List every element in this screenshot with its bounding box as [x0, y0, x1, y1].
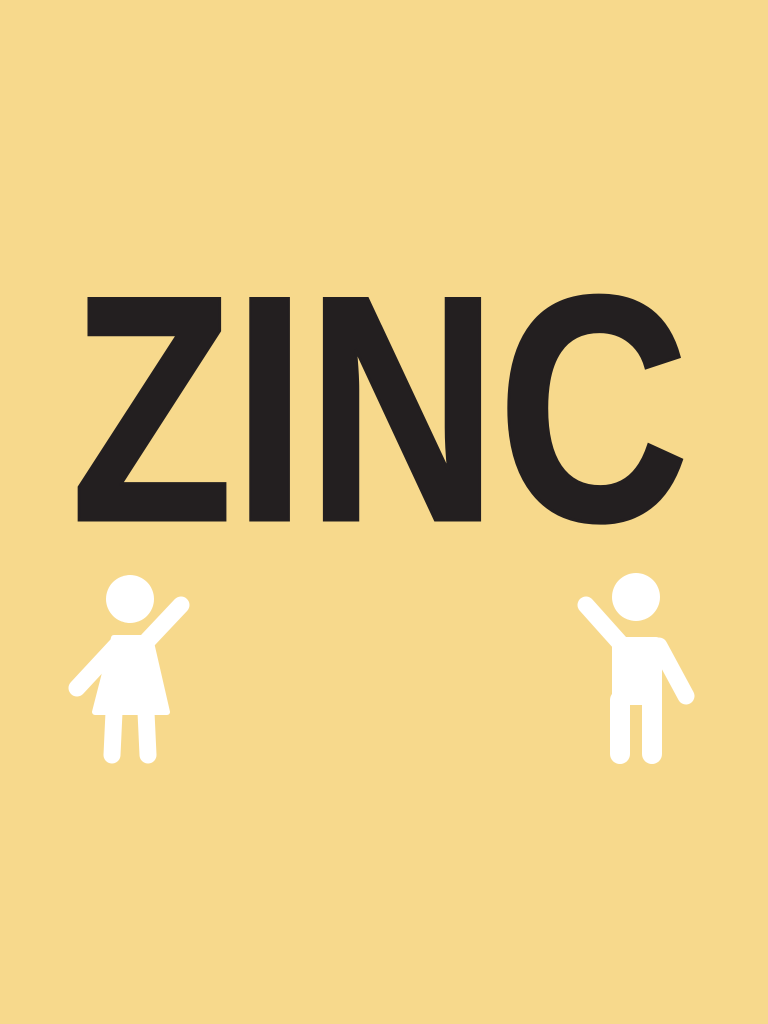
- icon: girl: [77, 575, 181, 755]
- icon: boy: [586, 573, 686, 754]
